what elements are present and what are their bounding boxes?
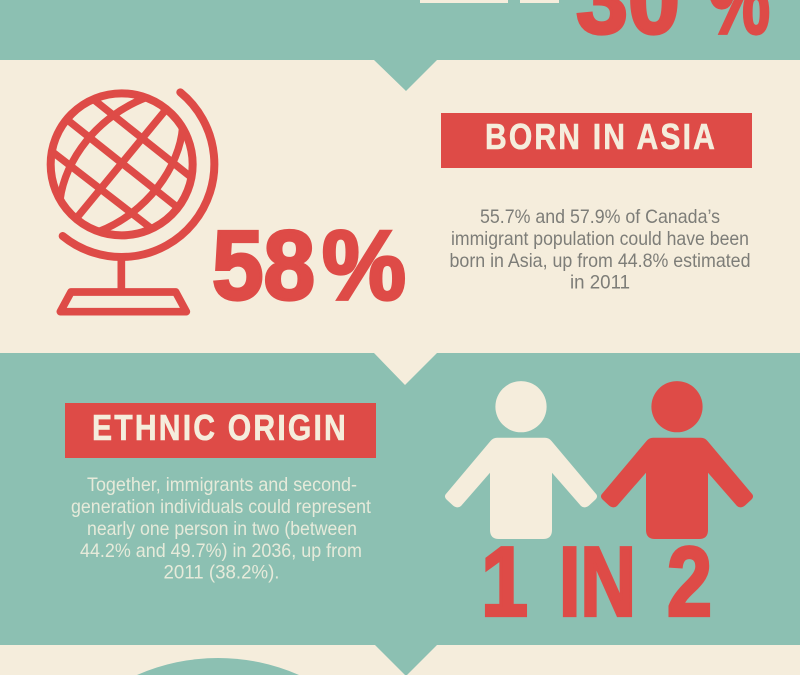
statistic: 1 in 2: 1 [481,526,528,636]
heading: ethnic origin [65,403,376,458]
text block: Asia description: born in Asia, up from 44.8% estimated [450,250,750,272]
text block: ethnic origin description: 44.2% and 49.7%) in 2036, up from [80,540,362,562]
icon: globe [50,92,214,312]
text block: Asia description: in 2011 [570,272,630,294]
statistic: 58 percent: % [322,210,406,320]
teal band [0,353,800,675]
panel: ethnic origin [0,353,800,675]
text block: ethnic origin description: 2011 (38.2%). [164,562,280,584]
text block: ethnic origin description: nearly one person in two (between [87,518,357,540]
text block: Asia description: immigrant population could have been [451,228,749,250]
panel: born in Asia [50,92,752,320]
icon: cream person [445,381,597,539]
text block: Asia description: 55.7% and 57.9% of Canada’s [480,206,720,228]
icon: red person [601,381,753,539]
top band [0,0,800,91]
panel: next section circle [137,658,299,675]
heading: born in Asia: BORN IN ASIA [485,116,717,157]
heading: ethnic origin: ETHNIC ORIGIN [92,407,348,448]
panel: top statistic [0,0,800,91]
statistic: 58 percent [212,210,406,320]
statistic: 1 in 2: 2 [667,526,712,636]
statistic: 1 in 2 [481,526,712,636]
text block: ethnic origin description [71,474,372,584]
text block: ethnic origin description: Together, immigrants and second- [87,474,357,496]
statistic: 58 percent: 58 [212,210,315,320]
statistic: 1 in 2: IN [559,526,636,636]
clipped cream figures [420,0,559,3]
text block: Asia description [450,206,750,294]
statistic: 30 percent [576,0,770,54]
heading: born in Asia [441,113,752,168]
text block: ethnic origin description: generation individuals could represent [71,496,372,518]
